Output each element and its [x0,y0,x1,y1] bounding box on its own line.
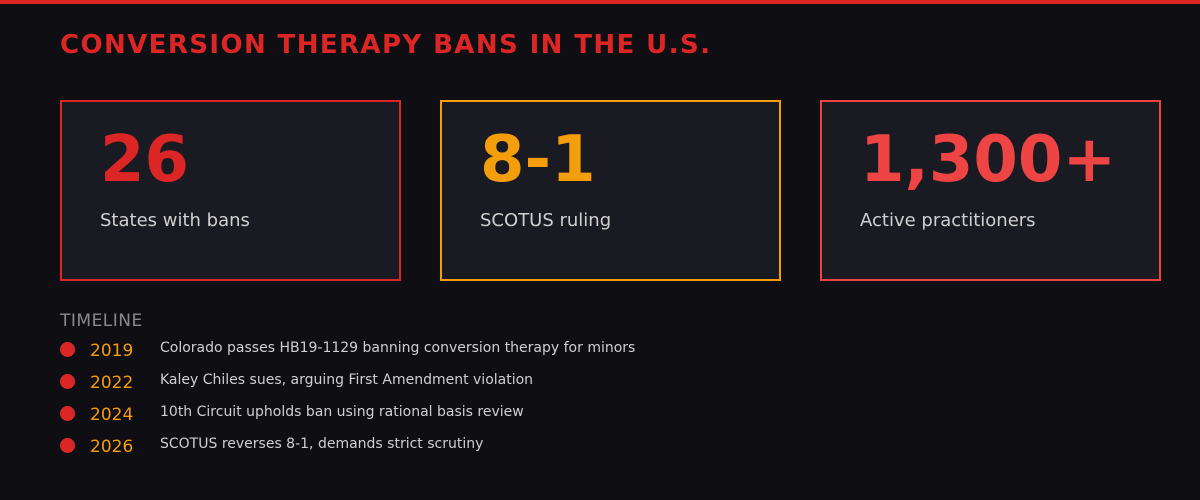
timeline row 2019: 2019 [90,341,133,361]
timeline row 2019: Colorado passes HB19-1129 banning conversion therapy for minors [160,340,635,356]
card: states: States with bans [100,210,250,231]
title: CONVERSION THERAPY BANS IN THE U.S. [60,30,711,60]
timeline row 2026 [60,436,483,457]
timeline row 2024 [60,404,524,425]
card: scotus: SCOTUS ruling [480,210,611,231]
card: practitioners: 1,300+ [860,123,1116,197]
card: states: 26 [100,123,189,197]
timeline row 2022: 2022 [90,373,133,393]
timeline row 2026: 2026 [90,437,133,457]
card: scotus [440,100,781,281]
timeline heading: TIMELINE [60,311,143,331]
timeline row 2019 [60,340,635,361]
card: practitioners [820,100,1161,281]
timeline row 2022: Kaley Chiles sues, arguing First Amendment violation [160,372,533,388]
card: states [60,100,401,281]
timeline row 2024: 10th Circuit upholds ban using rational basis review [160,404,524,420]
timeline row 2022 [60,372,533,393]
card: practitioners: Active practitioners [860,210,1036,231]
timeline row 2024: 2024 [90,405,133,425]
timeline row 2026: SCOTUS reverses 8-1, demands strict scrutiny [160,436,483,452]
card: scotus: 8-1 [480,123,596,197]
